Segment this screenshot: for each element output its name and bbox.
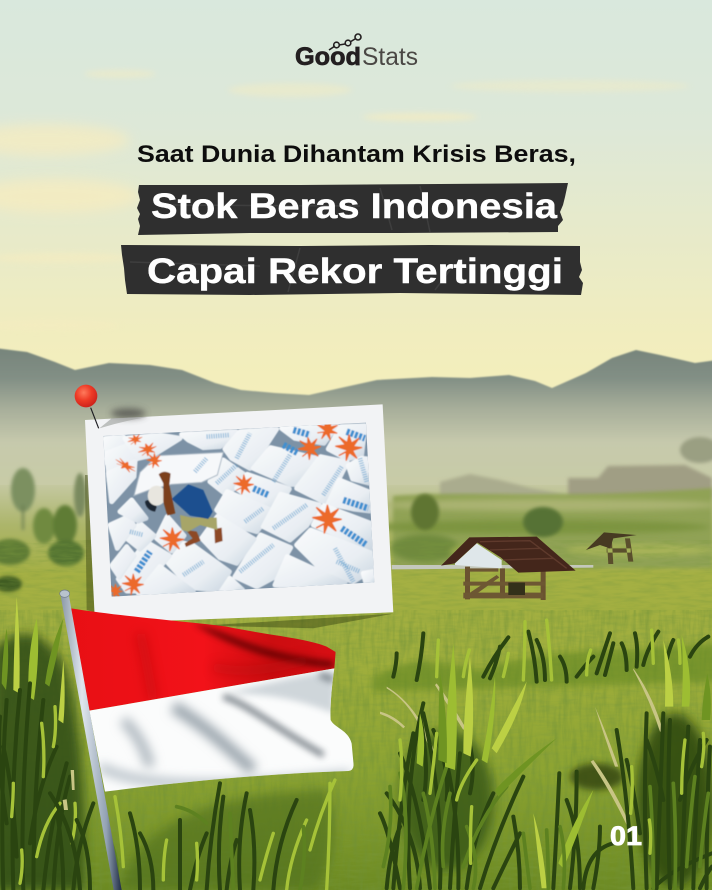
pole finial <box>60 590 70 597</box>
GoodStats logo <box>295 34 418 71</box>
centre grass clump <box>380 643 557 888</box>
logo chart line icon <box>329 34 361 50</box>
right grass clump <box>591 635 712 888</box>
background: distant house and treeline right <box>370 437 712 568</box>
kicker line: Saat Dunia Dihantam Krisis Beras, <box>137 141 576 168</box>
tape 2 <box>121 245 583 295</box>
card shadow <box>85 475 393 628</box>
background: distant trees left <box>0 468 86 592</box>
background scene right: huts and foreground grass <box>373 532 712 888</box>
pin head <box>75 385 97 407</box>
field texture <box>0 540 712 890</box>
road <box>392 565 593 569</box>
flag: white band <box>87 667 357 797</box>
tape 1 highlight <box>170 186 430 232</box>
hut <box>441 537 576 600</box>
pin needle <box>91 408 99 428</box>
small rear hut <box>586 532 637 564</box>
foreground grass left <box>0 597 93 890</box>
logo wordmark: Good <box>295 43 361 71</box>
photo: sacks of rice <box>100 416 377 598</box>
headline line 1: Stok Beras Indonesia <box>151 187 558 226</box>
photo card with pin <box>75 385 393 628</box>
sack print <box>108 416 368 598</box>
photo frame <box>85 404 393 623</box>
headline block <box>121 141 583 295</box>
background: far mountains <box>0 348 712 500</box>
flag: red band <box>71 608 336 710</box>
grass texture <box>0 610 712 890</box>
lower centre grass clump <box>513 772 613 888</box>
tape 1 <box>137 183 568 235</box>
tape 2 highlight <box>130 248 450 292</box>
GoodStats logo: Stats <box>362 43 418 71</box>
pin shadow <box>111 408 146 418</box>
worker carrying sack <box>134 452 223 547</box>
background: sky <box>0 0 712 420</box>
paper curl shadow <box>99 417 147 428</box>
background: rice field <box>0 485 712 890</box>
foreground grass under the flag <box>50 780 335 890</box>
sacks <box>105 426 374 593</box>
mid bank of grass <box>373 643 712 692</box>
dark shadow patch <box>570 763 623 790</box>
background: clouds <box>0 70 690 330</box>
Indonesian flag on pole <box>60 590 357 890</box>
headline line 2: Capai Rekor Tertinggi <box>147 252 563 291</box>
page number: 01 <box>610 821 642 851</box>
flag pole <box>61 596 122 890</box>
